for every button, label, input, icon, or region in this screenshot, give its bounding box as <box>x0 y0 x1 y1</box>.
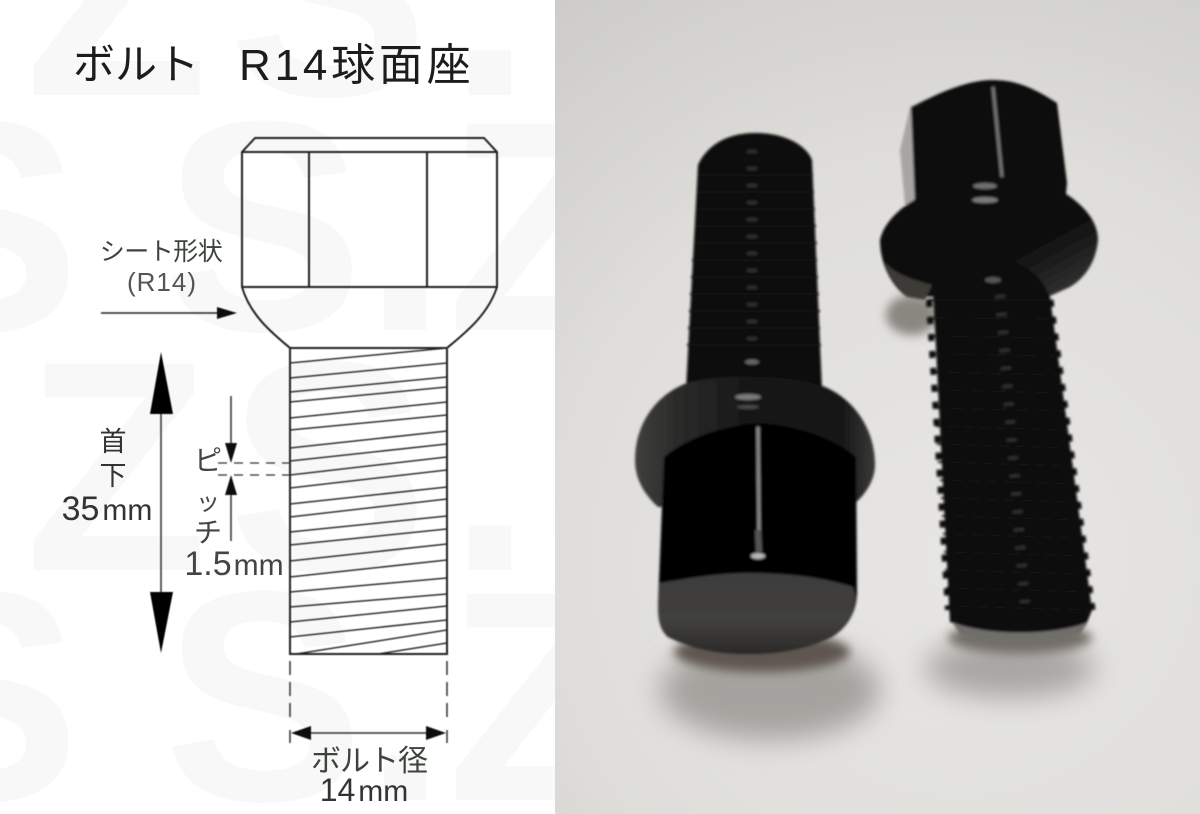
right bolt head <box>900 80 1067 205</box>
left bolt highlights <box>735 394 761 400</box>
bolt diagram <box>101 138 497 743</box>
dimension: under-neck length arrow <box>150 352 173 653</box>
label: bolt diameter 14mm: 14mm <box>320 772 408 808</box>
watermark: ZS. <box>25 298 552 634</box>
label: pitch 1.5mm: チ <box>194 517 222 548</box>
label: under-neck 35mm: 首 <box>100 427 126 457</box>
photo background <box>555 0 1200 814</box>
label: pitch 1.5mm: ッ <box>196 489 220 516</box>
label: under-neck 35mm: 下 <box>100 461 126 491</box>
title: R14 seat type: R14球面座 <box>239 41 475 90</box>
label: pitch 1.5mm: 1.5mm <box>184 545 284 583</box>
right bolt highlights <box>973 183 997 189</box>
flange inner dark <box>664 432 855 490</box>
right bolt flange <box>880 178 1098 297</box>
title: ボルト <box>73 41 199 88</box>
label: pitch 1.5mm <box>184 445 284 583</box>
left bolt thread <box>686 133 822 390</box>
bolt head <box>242 138 497 348</box>
bolt photo: left bolt <box>635 133 875 654</box>
label: seat shape: シート形状 <box>100 238 223 266</box>
label: pitch 1.5mm: ピ <box>194 445 222 476</box>
left bolt flange <box>635 377 875 507</box>
bolt photo: right bolt <box>880 80 1098 640</box>
dimension: seat arrow <box>101 307 237 319</box>
label: under-neck 35mm <box>62 427 152 528</box>
thread teeth <box>1050 300 1092 610</box>
label: bolt diameter 14mm <box>311 745 428 808</box>
dimension: bolt diameter arrow <box>290 661 447 743</box>
bolt threaded shaft <box>290 348 447 654</box>
right bolt end face <box>952 622 1088 640</box>
label: under-neck 35mm: 35mm <box>62 490 152 528</box>
panel: photo of bolts <box>555 0 1200 814</box>
right bolt thread <box>933 259 1092 636</box>
thread highlight <box>747 150 757 345</box>
label: seat shape <box>100 238 223 297</box>
label: bolt diameter 14mm: ボルト径 <box>311 745 428 778</box>
dimension: pitch arrows <box>218 396 290 541</box>
label: R14: (R14) <box>127 267 197 297</box>
right bolt flange lip <box>885 262 932 300</box>
watermark <box>0 0 555 814</box>
left bolt end face <box>658 573 855 654</box>
shadows <box>660 295 1095 740</box>
left bolt head <box>658 423 857 654</box>
